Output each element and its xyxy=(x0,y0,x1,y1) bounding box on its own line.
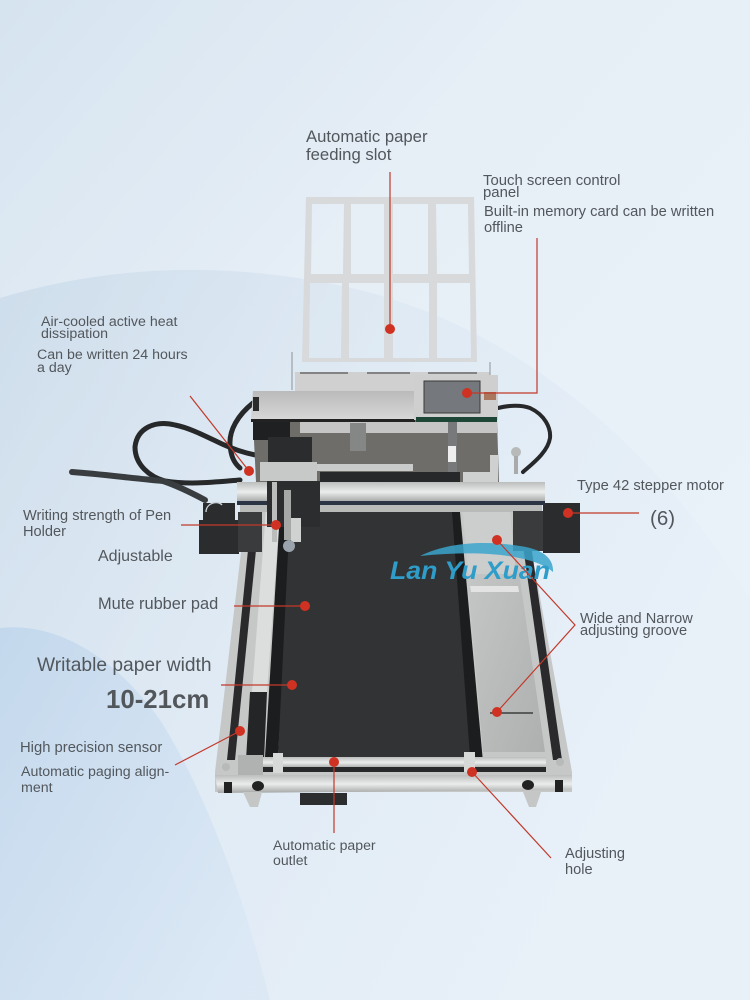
label: touch screen: panel xyxy=(483,185,519,201)
label: paper width: Writable paper width xyxy=(37,655,212,676)
label: heat dissipation: dissipation xyxy=(41,326,108,342)
callout dots xyxy=(235,324,573,777)
label: adjusting hole: hole xyxy=(565,862,593,878)
base frame xyxy=(215,510,572,807)
tray rear plate xyxy=(295,372,492,392)
X-axis crossbar xyxy=(237,482,545,552)
outer black stripes xyxy=(227,510,260,760)
label: groove: Wide and Narrow xyxy=(580,611,693,627)
watermark: Lan Yu Xuan xyxy=(390,543,553,585)
label: paging alignment: Automatic paging align- xyxy=(21,764,169,780)
label: paper feeding slot: feeding slot xyxy=(306,145,392,164)
label: paging alignment: ment xyxy=(21,780,53,796)
stepper motors xyxy=(199,503,580,554)
label: stepper motor: Type 42 stepper motor xyxy=(577,478,724,494)
front roller xyxy=(262,757,546,768)
label: groove: adjusting groove xyxy=(580,623,687,639)
label: pen holder: Writing strength of Pen xyxy=(23,508,171,524)
label: rubber pad: Mute rubber pad xyxy=(98,595,218,613)
label: memory card: offline xyxy=(484,220,523,236)
label: motor count: (6) xyxy=(650,507,675,530)
watermark: Lan Yu Xuan: Lan Yu Xuan xyxy=(390,557,550,585)
left inner plate xyxy=(252,510,280,692)
front bar xyxy=(215,775,572,793)
top cover plate xyxy=(251,391,414,419)
label: heat dissipation: Air-cooled active heat xyxy=(41,314,177,330)
black side rails xyxy=(265,512,293,757)
label: paper feeding slot: Automatic paper xyxy=(306,127,428,146)
paper feeding tray xyxy=(295,197,492,392)
label: 24 hours: Can be written 24 hours xyxy=(37,347,188,363)
label: paper outlet: outlet xyxy=(273,852,308,868)
label: paper outlet: Automatic paper xyxy=(273,837,376,853)
label: width value: 10-21cm xyxy=(106,686,209,714)
label: pen holder: Holder xyxy=(23,524,66,540)
label: adjustable: Adjustable xyxy=(98,548,173,565)
callout lines xyxy=(175,172,639,858)
label: 24 hours: a day xyxy=(37,360,73,376)
label: touch screen: Touch screen control xyxy=(483,173,620,189)
pen carriage xyxy=(260,437,320,552)
cables xyxy=(72,403,550,500)
touch screen control panel xyxy=(414,375,498,422)
label: adjusting hole: Adjusting xyxy=(565,846,625,862)
label: memory card: Built-in memory card can be written xyxy=(484,204,714,220)
right metal plate xyxy=(462,510,545,752)
rear assembly xyxy=(253,420,521,482)
label: sensor: High precision sensor xyxy=(20,740,162,756)
